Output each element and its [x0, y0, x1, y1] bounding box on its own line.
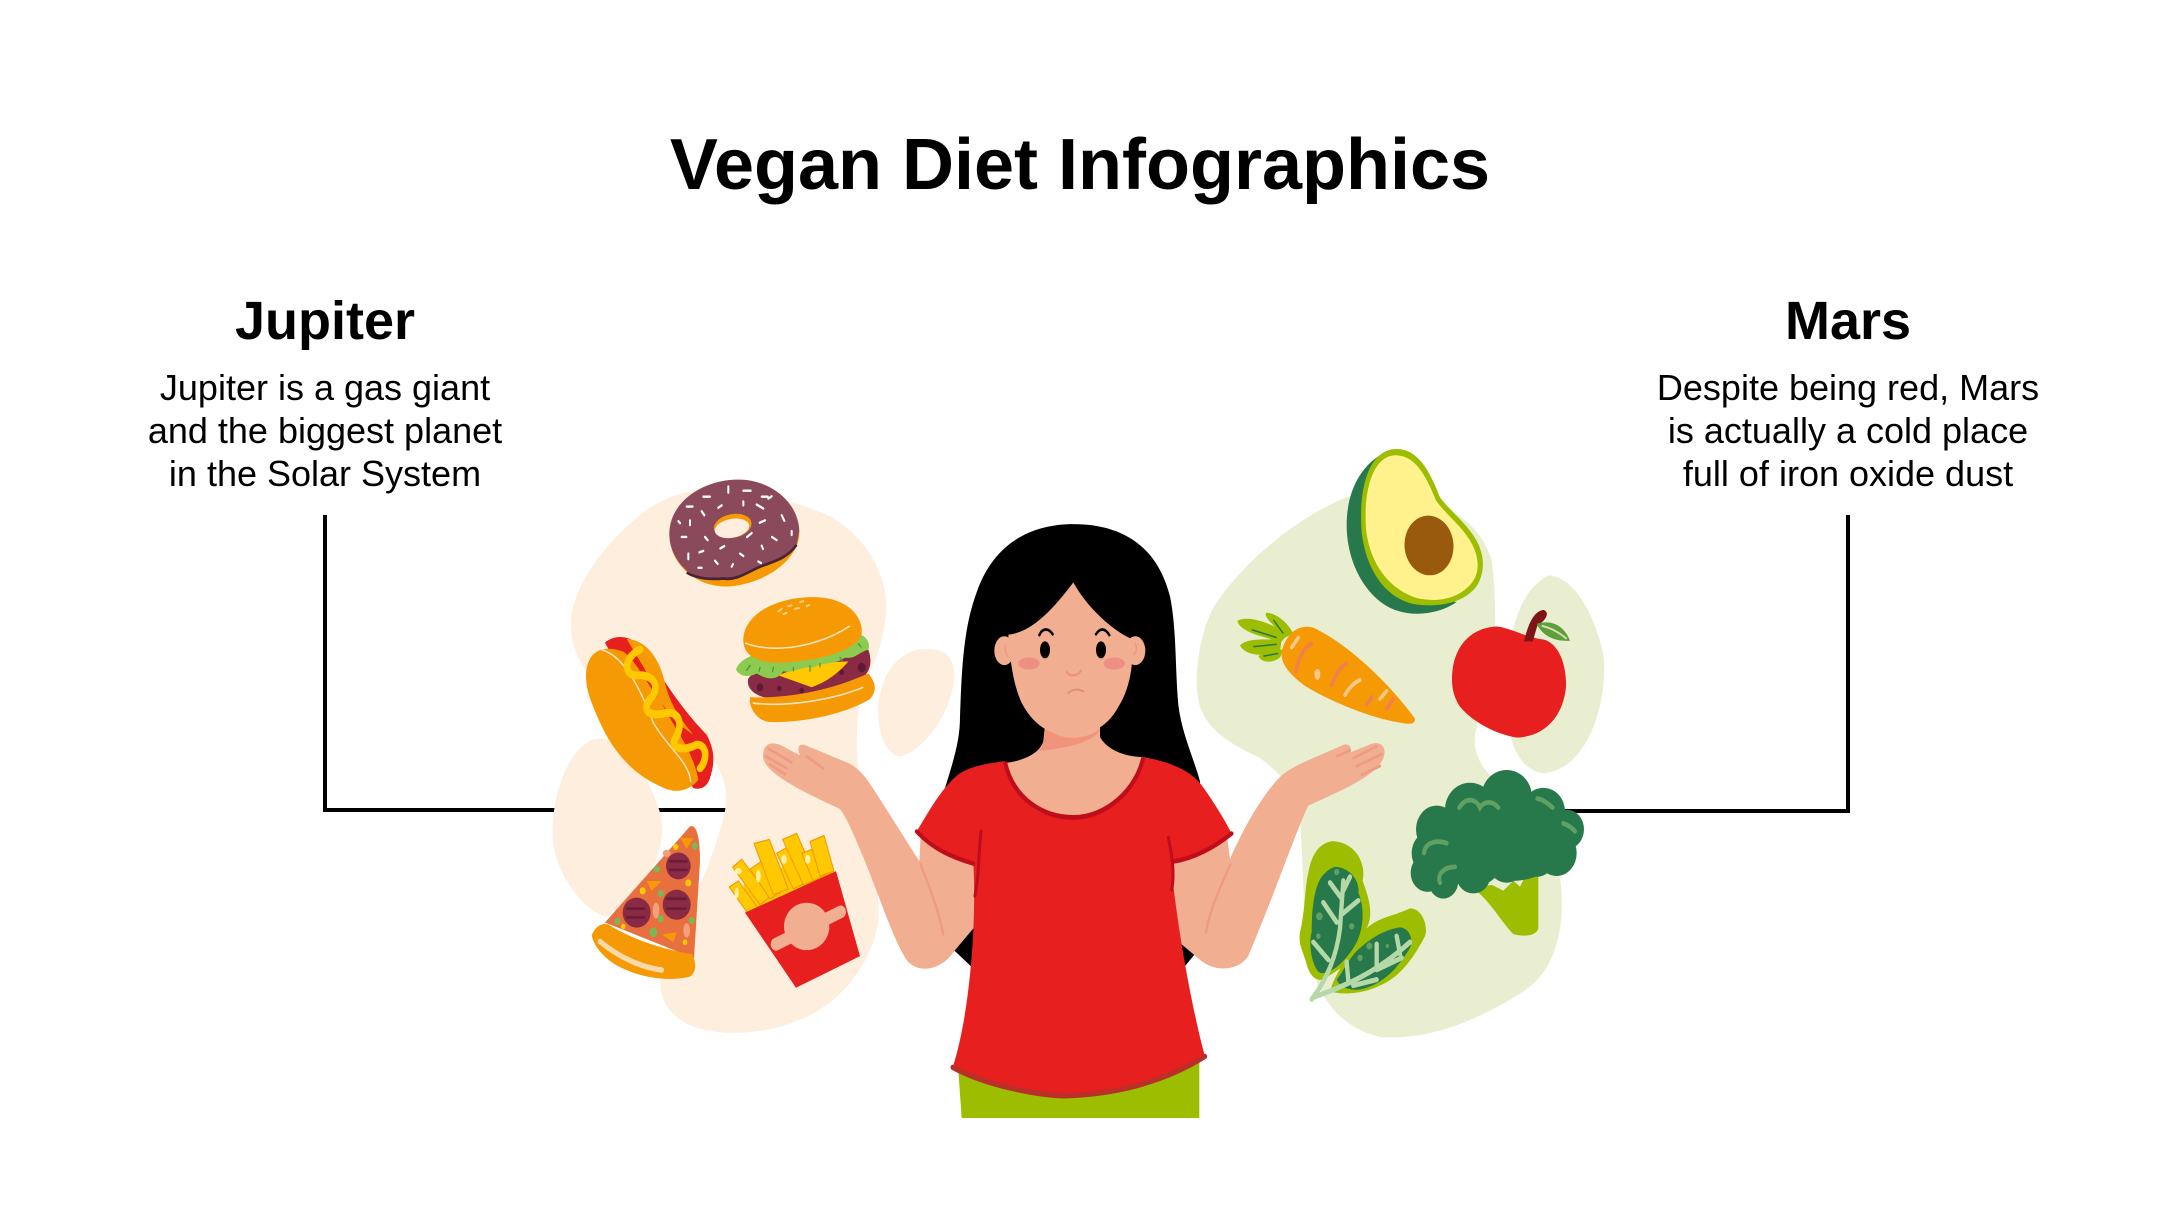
body text: Mars: is actually a cold place [1668, 410, 2028, 451]
left arm [763, 743, 977, 969]
character: woman [763, 524, 1385, 1118]
connector line: Jupiter to junk food [325, 515, 726, 810]
background blob: main green [1197, 497, 1562, 1037]
icon: hot dog [586, 637, 713, 791]
panel: healthy food background [1197, 497, 1604, 1037]
icon: broccoli [1411, 770, 1584, 936]
head and torso [917, 582, 1232, 1118]
icon: avocado [1347, 449, 1483, 614]
body text: Jupiter: and the biggest planet [148, 410, 502, 451]
body text: Mars: full of iron oxide dust [1683, 453, 2013, 494]
heading: Jupiter: Jupiter [235, 291, 415, 351]
panel: Mars text [1657, 291, 2039, 494]
neck and chest [1003, 725, 1145, 819]
background blob: small green [1507, 576, 1604, 773]
title: Vegan Diet Infographics [670, 125, 1490, 205]
panel: healthy food [1237, 449, 1584, 999]
background blobs: cream [553, 489, 954, 1033]
pants [958, 1063, 1199, 1118]
body text: Mars: Despite being red, Mars [1657, 367, 2039, 408]
icon: french fries [729, 834, 860, 988]
icon: carrot [1237, 613, 1415, 724]
red shirt [917, 757, 1232, 1097]
hair [943, 524, 1200, 972]
icon: donut [669, 480, 799, 587]
connector line: Mars to vegetables [1560, 515, 1848, 811]
icon: pizza [592, 826, 700, 979]
panel: junk food [553, 480, 954, 1033]
heading: Mars: Mars [1785, 291, 1911, 351]
icon: leafy greens [1300, 841, 1426, 999]
icon: burger [736, 597, 875, 722]
body text: Jupiter: in the Solar System [169, 453, 481, 494]
icon: apple [1452, 610, 1570, 738]
panel: Jupiter text [148, 291, 502, 494]
body text: Jupiter: Jupiter is a gas giant [160, 367, 490, 408]
face [994, 582, 1145, 736]
right arm [1167, 743, 1385, 968]
